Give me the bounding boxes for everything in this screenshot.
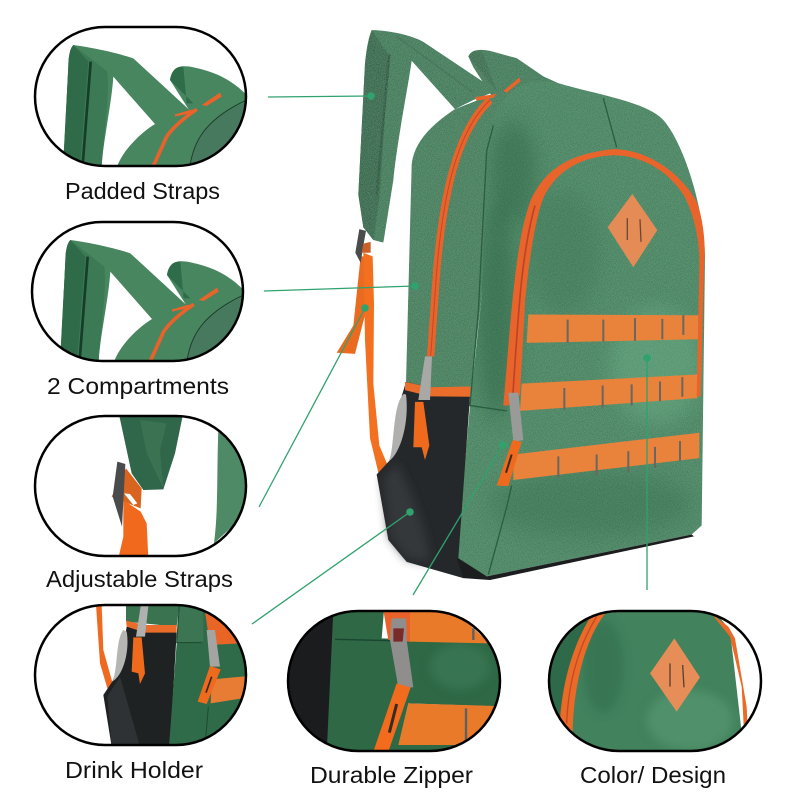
diamond	[650, 638, 700, 712]
leader lines and dots	[252, 92, 651, 624]
fabric	[547, 610, 744, 753]
side strap	[96, 605, 113, 692]
slot	[389, 704, 397, 733]
bottom base	[457, 535, 694, 580]
mesh silver	[112, 630, 128, 682]
inset: padded straps	[35, 27, 250, 166]
main backpack illustration	[337, 30, 705, 580]
main zipper dark line	[431, 100, 490, 356]
pocket zipper dark line	[513, 205, 535, 398]
green top	[126, 605, 179, 627]
binding	[126, 621, 177, 633]
inset: 2 compartments	[32, 222, 247, 361]
orange strap upper	[112, 468, 142, 508]
adjustable strap loose end	[337, 256, 366, 354]
fabric body	[406, 81, 705, 576]
mesh silver edge	[388, 394, 407, 462]
mesh	[103, 627, 177, 747]
right panel	[169, 612, 245, 744]
buckle	[355, 229, 366, 263]
slot	[206, 677, 212, 693]
body edge	[214, 432, 245, 544]
strap anchor	[362, 242, 371, 253]
right zipper	[712, 614, 748, 732]
label: adjustable straps: Adjustable Straps	[46, 566, 233, 592]
orange strap lower	[118, 500, 148, 558]
diamond patch	[608, 194, 657, 267]
label: padded straps: Padded Straps	[65, 178, 220, 204]
strap slit	[124, 493, 137, 505]
seam	[177, 605, 208, 747]
top webbing	[408, 610, 490, 643]
black mesh	[289, 617, 333, 742]
zipper tab two	[497, 440, 522, 486]
zipper pull one	[418, 356, 432, 400]
inset: adjustable straps	[35, 416, 250, 558]
buckle	[113, 462, 125, 527]
webbing stitches	[558, 315, 683, 477]
zip two	[207, 630, 220, 667]
main zipper	[431, 100, 490, 356]
shoulder strap	[358, 30, 497, 243]
back strap	[468, 50, 563, 104]
lower webbing	[398, 703, 497, 745]
orange tab	[373, 683, 411, 752]
zipper teeth	[383, 610, 410, 642]
side orange strap	[363, 253, 387, 474]
diamond stitches	[627, 218, 641, 242]
stitches	[466, 628, 473, 740]
seam	[335, 639, 392, 641]
tab two	[198, 666, 221, 704]
pocket zipper and band	[205, 612, 237, 645]
top zip tabs	[475, 77, 521, 101]
label: 2 compartments: 2 Compartments	[47, 373, 229, 399]
inset: color design	[547, 610, 761, 753]
right panel upper	[177, 605, 203, 643]
darker area	[583, 620, 623, 713]
lower green strip	[398, 745, 455, 750]
label: durable zipper: Durable Zipper	[310, 762, 473, 788]
dark left side	[547, 610, 595, 733]
zipper line	[567, 617, 597, 723]
zipper tab one	[413, 402, 429, 460]
seams	[470, 98, 617, 575]
webbing bands	[513, 315, 699, 480]
zipper pull head	[393, 628, 404, 642]
fabric lighter area	[647, 690, 733, 750]
zipper pull two	[508, 393, 523, 442]
strap end	[119, 416, 183, 490]
pocket binding	[405, 382, 471, 397]
zipper tab slot	[506, 455, 512, 473]
zipper pull	[390, 618, 413, 687]
label: drink holder: Drink Holder	[65, 757, 203, 783]
label: color design: Color/ Design	[580, 762, 726, 788]
mesh drink pocket	[377, 382, 487, 578]
inset: durable zipper	[287, 610, 503, 753]
tab one	[132, 637, 145, 684]
green panel	[327, 610, 503, 753]
mesh lighter area	[383, 464, 430, 562]
lighter patch	[433, 646, 487, 688]
inset: drink holder	[35, 605, 250, 747]
zip one	[136, 606, 148, 637]
front pocket zipper	[503, 149, 705, 405]
mesh lower	[107, 677, 140, 747]
strap fold	[140, 420, 167, 488]
lower band	[211, 676, 248, 703]
stitches	[670, 663, 684, 687]
front panel shading	[477, 122, 703, 536]
left zipper	[560, 610, 608, 733]
